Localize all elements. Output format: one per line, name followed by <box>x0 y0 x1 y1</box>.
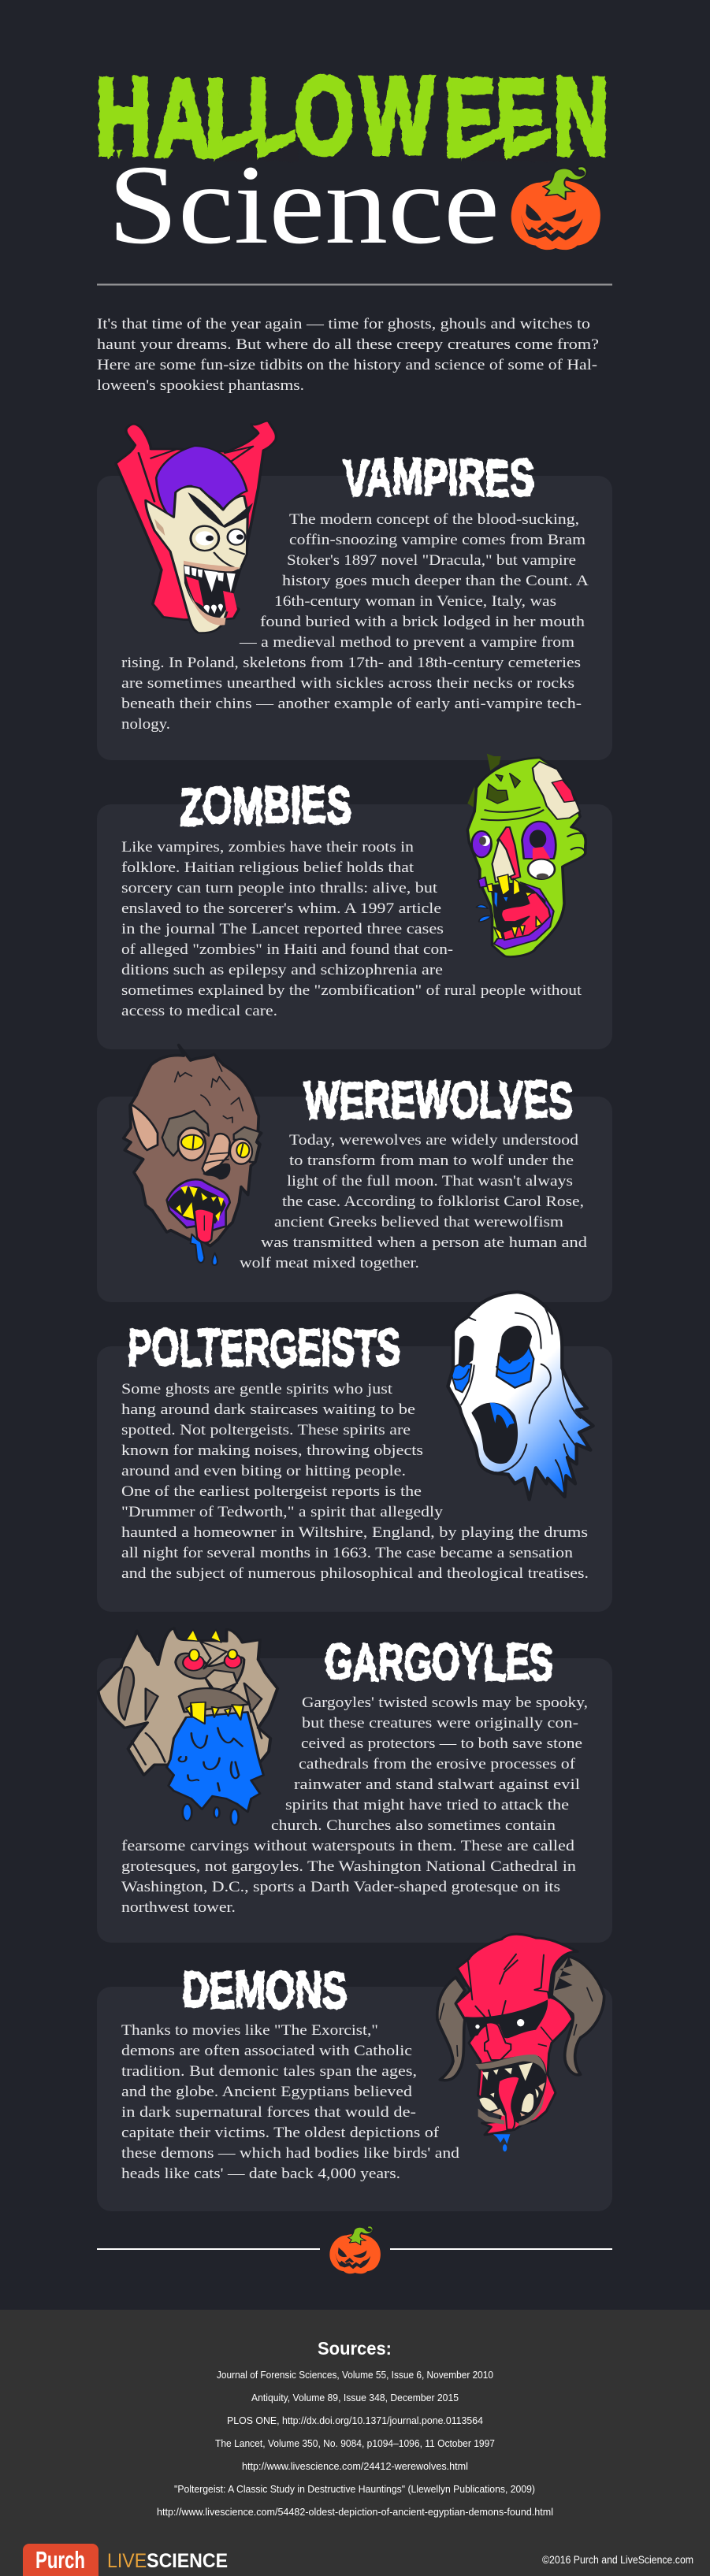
body text: werewolves: the case. According to folklorist Carol Rose, <box>282 1193 584 1210</box>
body text: vampires: found buried with a brick lodged in her mouth <box>260 614 585 630</box>
body text: zombies: sorcery can turn people into thralls: alive, but <box>121 880 438 896</box>
body text: gargoyles: ceived as protectors — to both save stone <box>301 1735 582 1752</box>
body text: poltergeists: One of the earliest poltergeist reports is the <box>121 1483 422 1500</box>
heading: Vampires: VAMPIRES <box>344 447 534 507</box>
body text: demons: demons are often associated with Catholic <box>121 2043 412 2059</box>
body text: vampires: are sometimes unearthed with sickles across their necks or rocks <box>121 675 574 692</box>
body text: gargoyles: Washington, D.C., sports a Darth Vader-shaped grotesque on its <box>121 1879 560 1895</box>
body text: werewolves: ancient Greeks believed that werewolfism <box>274 1214 563 1230</box>
body text: demons <box>121 2022 460 2182</box>
divider: header rule <box>97 284 612 285</box>
heading: sources: Sources: <box>318 2338 392 2359</box>
panel: vampires <box>97 421 612 760</box>
illustration: demon <box>437 1934 604 2151</box>
body text: poltergeists: hang around dark staircases waiting to be <box>121 1401 415 1418</box>
body text: gargoyles: church. Churches also sometimes contain <box>271 1817 556 1834</box>
icon: small pumpkin <box>329 2226 381 2273</box>
body text: werewolves: light of the full moon. That wasn't always <box>287 1173 573 1190</box>
body text: demons: and the globe. Ancient Egyptians believed <box>121 2084 413 2100</box>
body text: gargoyles: fearsome carvings without waterspouts in them. These are called <box>121 1838 575 1854</box>
body text: poltergeists: haunted a homeowner in Wiltshire, England, by playing the drums <box>121 1524 588 1541</box>
panel: zombies <box>97 754 612 1049</box>
source list: http://www.livescience.com/54482-oldest-depiction-of-ancient-egyptian-demons-found.html <box>157 2507 553 2518</box>
intro text: loween's spookiest phantasms. <box>97 377 304 394</box>
body text: poltergeists: known for making noises, throwing objects <box>121 1442 423 1459</box>
panel: poltergeists <box>97 1292 612 1612</box>
body text: poltergeists <box>121 1381 589 1582</box>
intro text <box>97 316 599 394</box>
footer band <box>0 2310 710 2576</box>
body text: gargoyles: spirits that might have tried to attack the <box>285 1797 569 1813</box>
heading: Demons: DEMONS <box>182 1960 348 2019</box>
body text: gargoyles: rainwater and stand stalwart against evil <box>294 1776 580 1793</box>
panel: demons <box>97 1934 612 2211</box>
body text: werewolves: was transmitted when a person ate human and <box>261 1234 588 1251</box>
body text: gargoyles: grotesques, not gargoyles. The Washington National Cathedral in <box>121 1858 577 1875</box>
body text: vampires: The modern concept of the blood-sucking, <box>289 511 579 528</box>
illustration: zombie <box>467 754 585 957</box>
title: Halloween: HALLOWEEN <box>95 54 609 180</box>
logo: Purch: Purch <box>35 2546 85 2574</box>
source list: The Lancet, Volume 350, No. 9084, p1094–1096, 11 October 1997 <box>215 2438 495 2449</box>
body text: werewolves <box>240 1132 588 1271</box>
body text: poltergeists: around and even biting or hitting people. <box>121 1463 406 1479</box>
body text: vampires: — a medieval method to prevent a vampire from <box>239 634 574 651</box>
panel: gargoyles <box>97 1628 612 1943</box>
illustration: ghost <box>448 1292 593 1499</box>
body text: vampires: rising. In Poland, skeletons from 17th- and 18th-century cemeteries <box>121 655 581 671</box>
body text: demons: capitate their victims. The oldest depictions of <box>121 2125 440 2141</box>
body text: gargoyles: northwest tower. <box>121 1899 236 1916</box>
heading: Poltergeists: POLTERGEISTS <box>128 1318 400 1377</box>
intro text: It's that time of the year again — time for ghosts, ghouls and witches to <box>97 316 590 332</box>
body text: poltergeists: Some ghosts are gentle spirits who just <box>121 1381 393 1397</box>
illustration: gargoyle <box>99 1628 277 1825</box>
source list: Journal of Forensic Sciences, Volume 55, Issue 6, November 2010 <box>217 2370 493 2381</box>
body text: werewolves: wolf meat mixed together. <box>240 1255 419 1271</box>
illustration: werewolf <box>124 1045 262 1265</box>
body text: demons: these demons — which had bodies like birds' and <box>121 2145 460 2162</box>
body text: vampires: 16th-century woman in Venice, Italy, was <box>274 593 556 610</box>
body text: poltergeists: and the subject of numerous philosophical and theological treatises. <box>121 1565 589 1582</box>
icon: jack-o-lantern <box>511 166 600 250</box>
body text: gargoyles: but these creatures were originally con- <box>302 1715 578 1732</box>
body text: zombies: ditions such as epilepsy and schizophrenia are <box>121 962 443 978</box>
body text: gargoyles <box>121 1694 588 1916</box>
body text: zombies: sometimes explained by the "zombification" of rural people without <box>121 982 582 999</box>
body text: vampires <box>121 511 589 733</box>
copyright: ©2016 Purch and LiveScience.com <box>542 2553 693 2566</box>
source list: http://www.livescience.com/24412-werewolves.html <box>242 2461 468 2472</box>
heading: Werewolves: WEREWOLVES <box>304 1070 573 1130</box>
illustration: vampire <box>116 421 277 633</box>
body text: gargoyles: cathedrals from the erosive processes of <box>299 1756 576 1772</box>
title: Science: Science <box>108 143 500 268</box>
body text: vampires: history goes much deeper than the Count. A <box>282 573 589 589</box>
intro text: haunt your dreams. But where do all these creepy creatures come from? <box>97 336 599 353</box>
heading: Zombies: ZOMBIES <box>180 775 351 836</box>
body text: poltergeists: all night for several months in 1663. The case became a sensation <box>121 1545 574 1561</box>
body text: vampires: coffin-snoozing vampire comes from Bram <box>289 532 585 548</box>
source list: Antiquity, Volume 89, Issue 348, December 2015 <box>251 2392 459 2403</box>
body text: demons: tradition. But demonic tales span the ages, <box>121 2063 417 2080</box>
body text: gargoyles: Gargoyles' twisted scowls may be spooky, <box>302 1694 588 1711</box>
body text: zombies: access to medical care. <box>121 1003 277 1019</box>
body text: vampires: beneath their chins — another example of early anti-vampire tech- <box>121 696 582 712</box>
body text: vampires: Stoker's 1897 novel "Dracula," but vampire <box>287 552 576 569</box>
body text: demons: heads like cats' — date back 4,000 years. <box>121 2166 400 2182</box>
heading: Gargoyles: GARGOYLES <box>325 1631 553 1691</box>
intro text: Here are some fun-size tidbits on the history and science of some of Hal- <box>97 357 597 373</box>
body text: zombies: in the journal The Lancet reported three cases <box>121 921 444 937</box>
source list: "Poltergeist: A Classic Study in Destructive Hauntings" (Llewellyn Publications, 2009) <box>174 2484 535 2495</box>
body text: zombies <box>121 839 582 1019</box>
panel: werewolves <box>97 1045 612 1302</box>
body text: werewolves: to transform from man to wolf under the <box>289 1153 574 1169</box>
body text: vampires: nology. <box>121 716 170 733</box>
body text: zombies: of alleged "zombies" in Haiti and found that con- <box>121 941 453 958</box>
source list <box>157 2370 553 2518</box>
body text: zombies: enslaved to the sorcerer's whim. A 1997 article <box>121 900 441 917</box>
source list: PLOS ONE, http://dx.doi.org/10.1371/journal.pone.0113564 <box>227 2415 483 2426</box>
divider with small pumpkin <box>97 2226 612 2273</box>
body text: zombies: Like vampires, zombies have their roots in <box>121 839 414 856</box>
body text: zombies: folklore. Haitian religious belief holds that <box>121 859 414 876</box>
body text: demons: in dark supernatural forces that would de- <box>121 2104 416 2121</box>
body text: poltergeists: spotted. Not poltergeists. These spirits are <box>121 1422 411 1438</box>
body text: werewolves: Today, werewolves are widely understood <box>289 1132 579 1149</box>
body text: poltergeists: "Drummer of Tedworth," a spirit that allegedly <box>121 1504 444 1520</box>
logo: LiveScience: LIVESCIENCE <box>107 2550 228 2572</box>
logo: Purch <box>23 2544 99 2576</box>
body text: demons: Thanks to movies like "The Exorcist," <box>121 2022 378 2039</box>
